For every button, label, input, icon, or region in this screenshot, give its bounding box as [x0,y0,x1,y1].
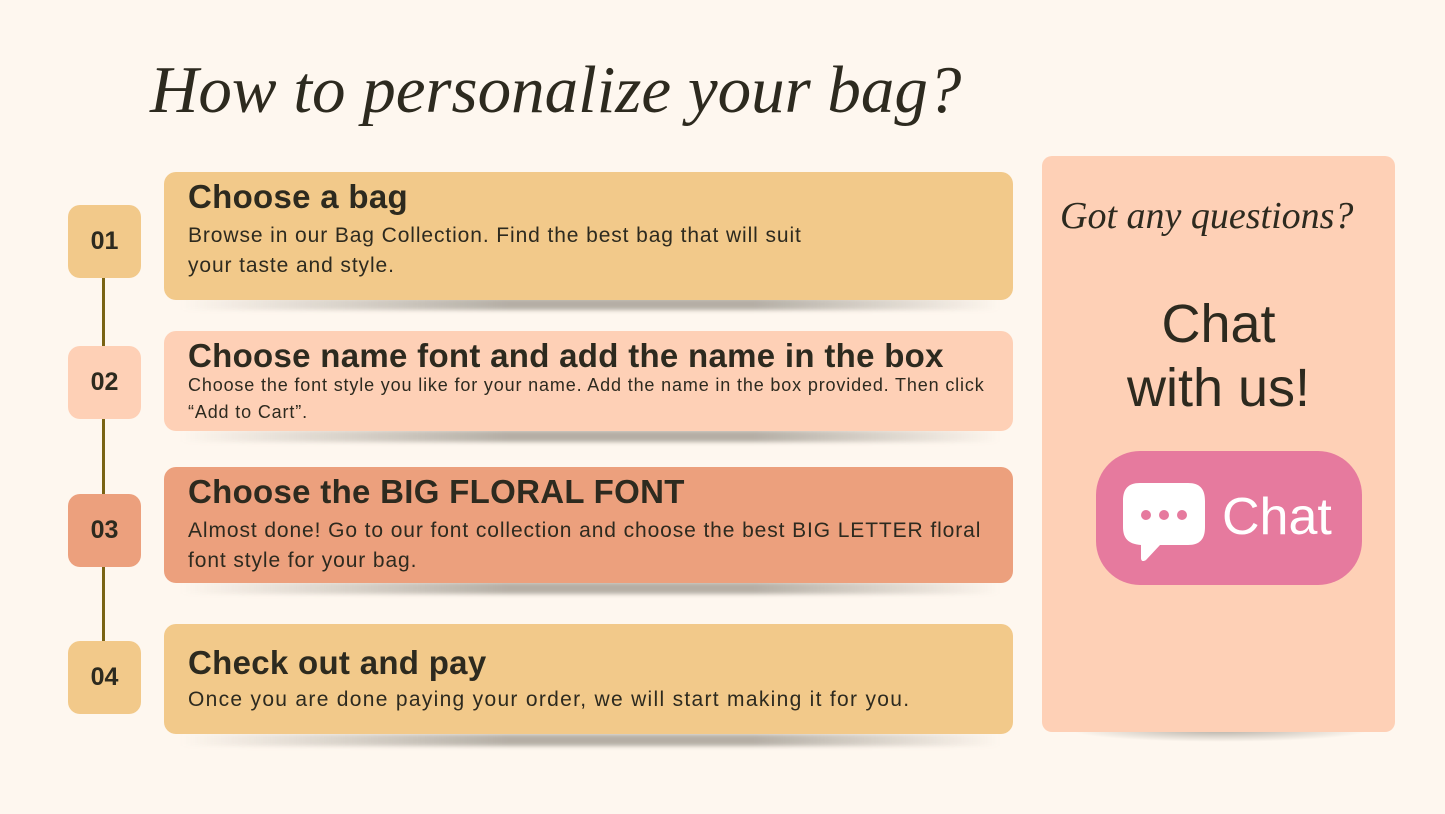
panel: chat [1042,156,1395,732]
card: choose name font: Choose the font style you like for your name. Add the name in the box provided. Then click [188,375,985,395]
card: choose name font: Choose name font and add the name in the box [188,337,944,374]
card: big floral font: Choose the BIG FLORAL FONT [188,473,685,510]
card: choose a bag: Browse in our Bag Collection. Find the best bag that will suit [188,224,802,247]
card: choose name font [164,331,1013,431]
panel shadow [1070,730,1370,742]
chat with us: Chat [1161,294,1276,354]
question text: Got any questions? [1060,195,1353,237]
title: How to personalize your bag? [150,53,961,127]
step 04 [68,641,141,714]
card: choose a bag: your taste and style. [188,254,395,277]
step 03 [68,494,141,567]
shadows [180,298,1000,310]
card: check out [164,624,1013,734]
timeline line [102,240,105,680]
icon: speech bubble [1123,483,1205,561]
chat button [1096,451,1362,585]
step 04: 04 [91,663,118,691]
card: big floral font: Almost done! Go to our font collection and choose the best BIG LETTER floral [188,519,981,542]
button label: Chat [1222,488,1332,546]
card: choose a bag [164,172,1013,300]
card: choose name font: “Add to Cart”. [188,402,308,422]
card: choose a bag: Choose a bag [188,178,408,215]
chat with us [1126,294,1310,418]
step 02: 02 [91,368,118,396]
step 02 [68,346,141,419]
chat with us: with us! [1127,358,1310,418]
card: check out: Check out and pay [188,644,486,681]
step 01: 01 [91,227,118,255]
card: big floral font: font style for your bag. [188,549,417,572]
card: check out: Once you are done paying your order, we will start making it for you. [188,688,910,711]
card: big floral font [164,467,1013,583]
step 03: 03 [91,516,118,544]
step 01 [68,205,141,278]
